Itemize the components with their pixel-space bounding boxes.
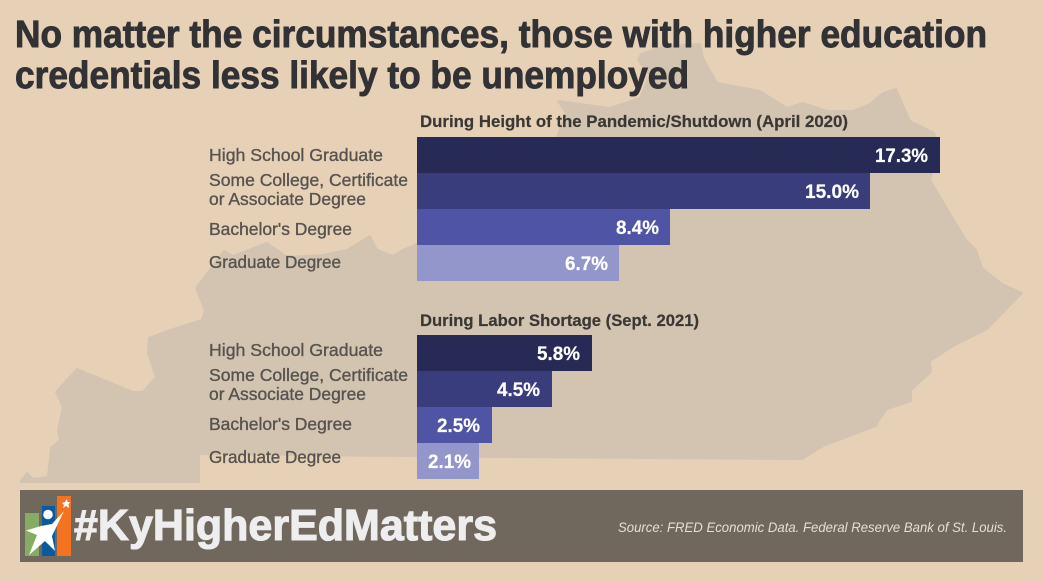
bar: some college 4.5%: [417, 371, 552, 407]
bar: high school 5.8%: [417, 335, 592, 371]
category labels: Sept. 2021: [209, 340, 408, 467]
heading: Sept. 2021: During Labor Shortage (Sept. 2021): [420, 312, 699, 330]
bar: graduate 6.7%: 6.7%: [565, 254, 608, 275]
bar: bachelor's 8.4%: 8.4%: [616, 218, 659, 239]
title: No matter the circumstances, those with higher education: [15, 14, 987, 56]
bar: graduate 2.1%: [417, 443, 479, 479]
title: [15, 14, 987, 97]
category labels: Sept. 2021: Bachelor's Degree: [209, 414, 352, 434]
bar: some college 15.0%: [417, 173, 870, 209]
bar: high school 17.3%: 17.3%: [875, 146, 928, 167]
category labels: April 2020: Bachelor's Degree: [209, 219, 352, 239]
source note: Source: FRED Economic Data. Federal Reserve Bank of St. Louis.: [618, 519, 1007, 535]
category labels: Sept. 2021: Graduate Degree: [209, 447, 341, 467]
bar: bachelor's 2.5%: 2.5%: [437, 416, 480, 437]
bar: high school 5.8%: 5.8%: [537, 344, 580, 365]
bar: graduate 2.1%: 2.1%: [428, 452, 471, 473]
bar: some college 4.5%: 4.5%: [497, 380, 540, 401]
category labels: Sept. 2021: High School Graduate: [209, 340, 383, 360]
hashtag: #KyHigherEdMatters: [74, 501, 497, 550]
background map: Kentucky silhouette: [21, 44, 1022, 482]
category labels: April 2020: High School Graduate: [209, 145, 383, 165]
category labels: Sept. 2021: or Associate Degree: [209, 384, 366, 404]
footer band: [20, 490, 1023, 562]
panel: Sept. 2021 chart: [209, 312, 699, 479]
category labels: April 2020: or Associate Degree: [209, 189, 366, 209]
bar: bachelor's 2.5%: [417, 407, 492, 443]
category labels: April 2020: Graduate Degree: [209, 252, 341, 272]
heading: April 2020: During Height of the Pandemic/Shutdown (April 2020): [420, 113, 848, 131]
icon: education logo: [25, 496, 71, 556]
bar: high school 17.3%: [417, 137, 940, 173]
bar: bachelor's 8.4%: [417, 209, 670, 245]
bar: some college 15.0%: 15.0%: [805, 182, 859, 203]
title: credentials less likely to be unemployed: [15, 55, 689, 97]
category labels: April 2020: [209, 145, 408, 272]
panel: April 2020 chart: [209, 113, 940, 281]
category labels: Sept. 2021: Some College, Certificate: [209, 365, 408, 385]
category labels: April 2020: Some College, Certificate: [209, 170, 408, 190]
bar: graduate 6.7%: [417, 245, 619, 281]
